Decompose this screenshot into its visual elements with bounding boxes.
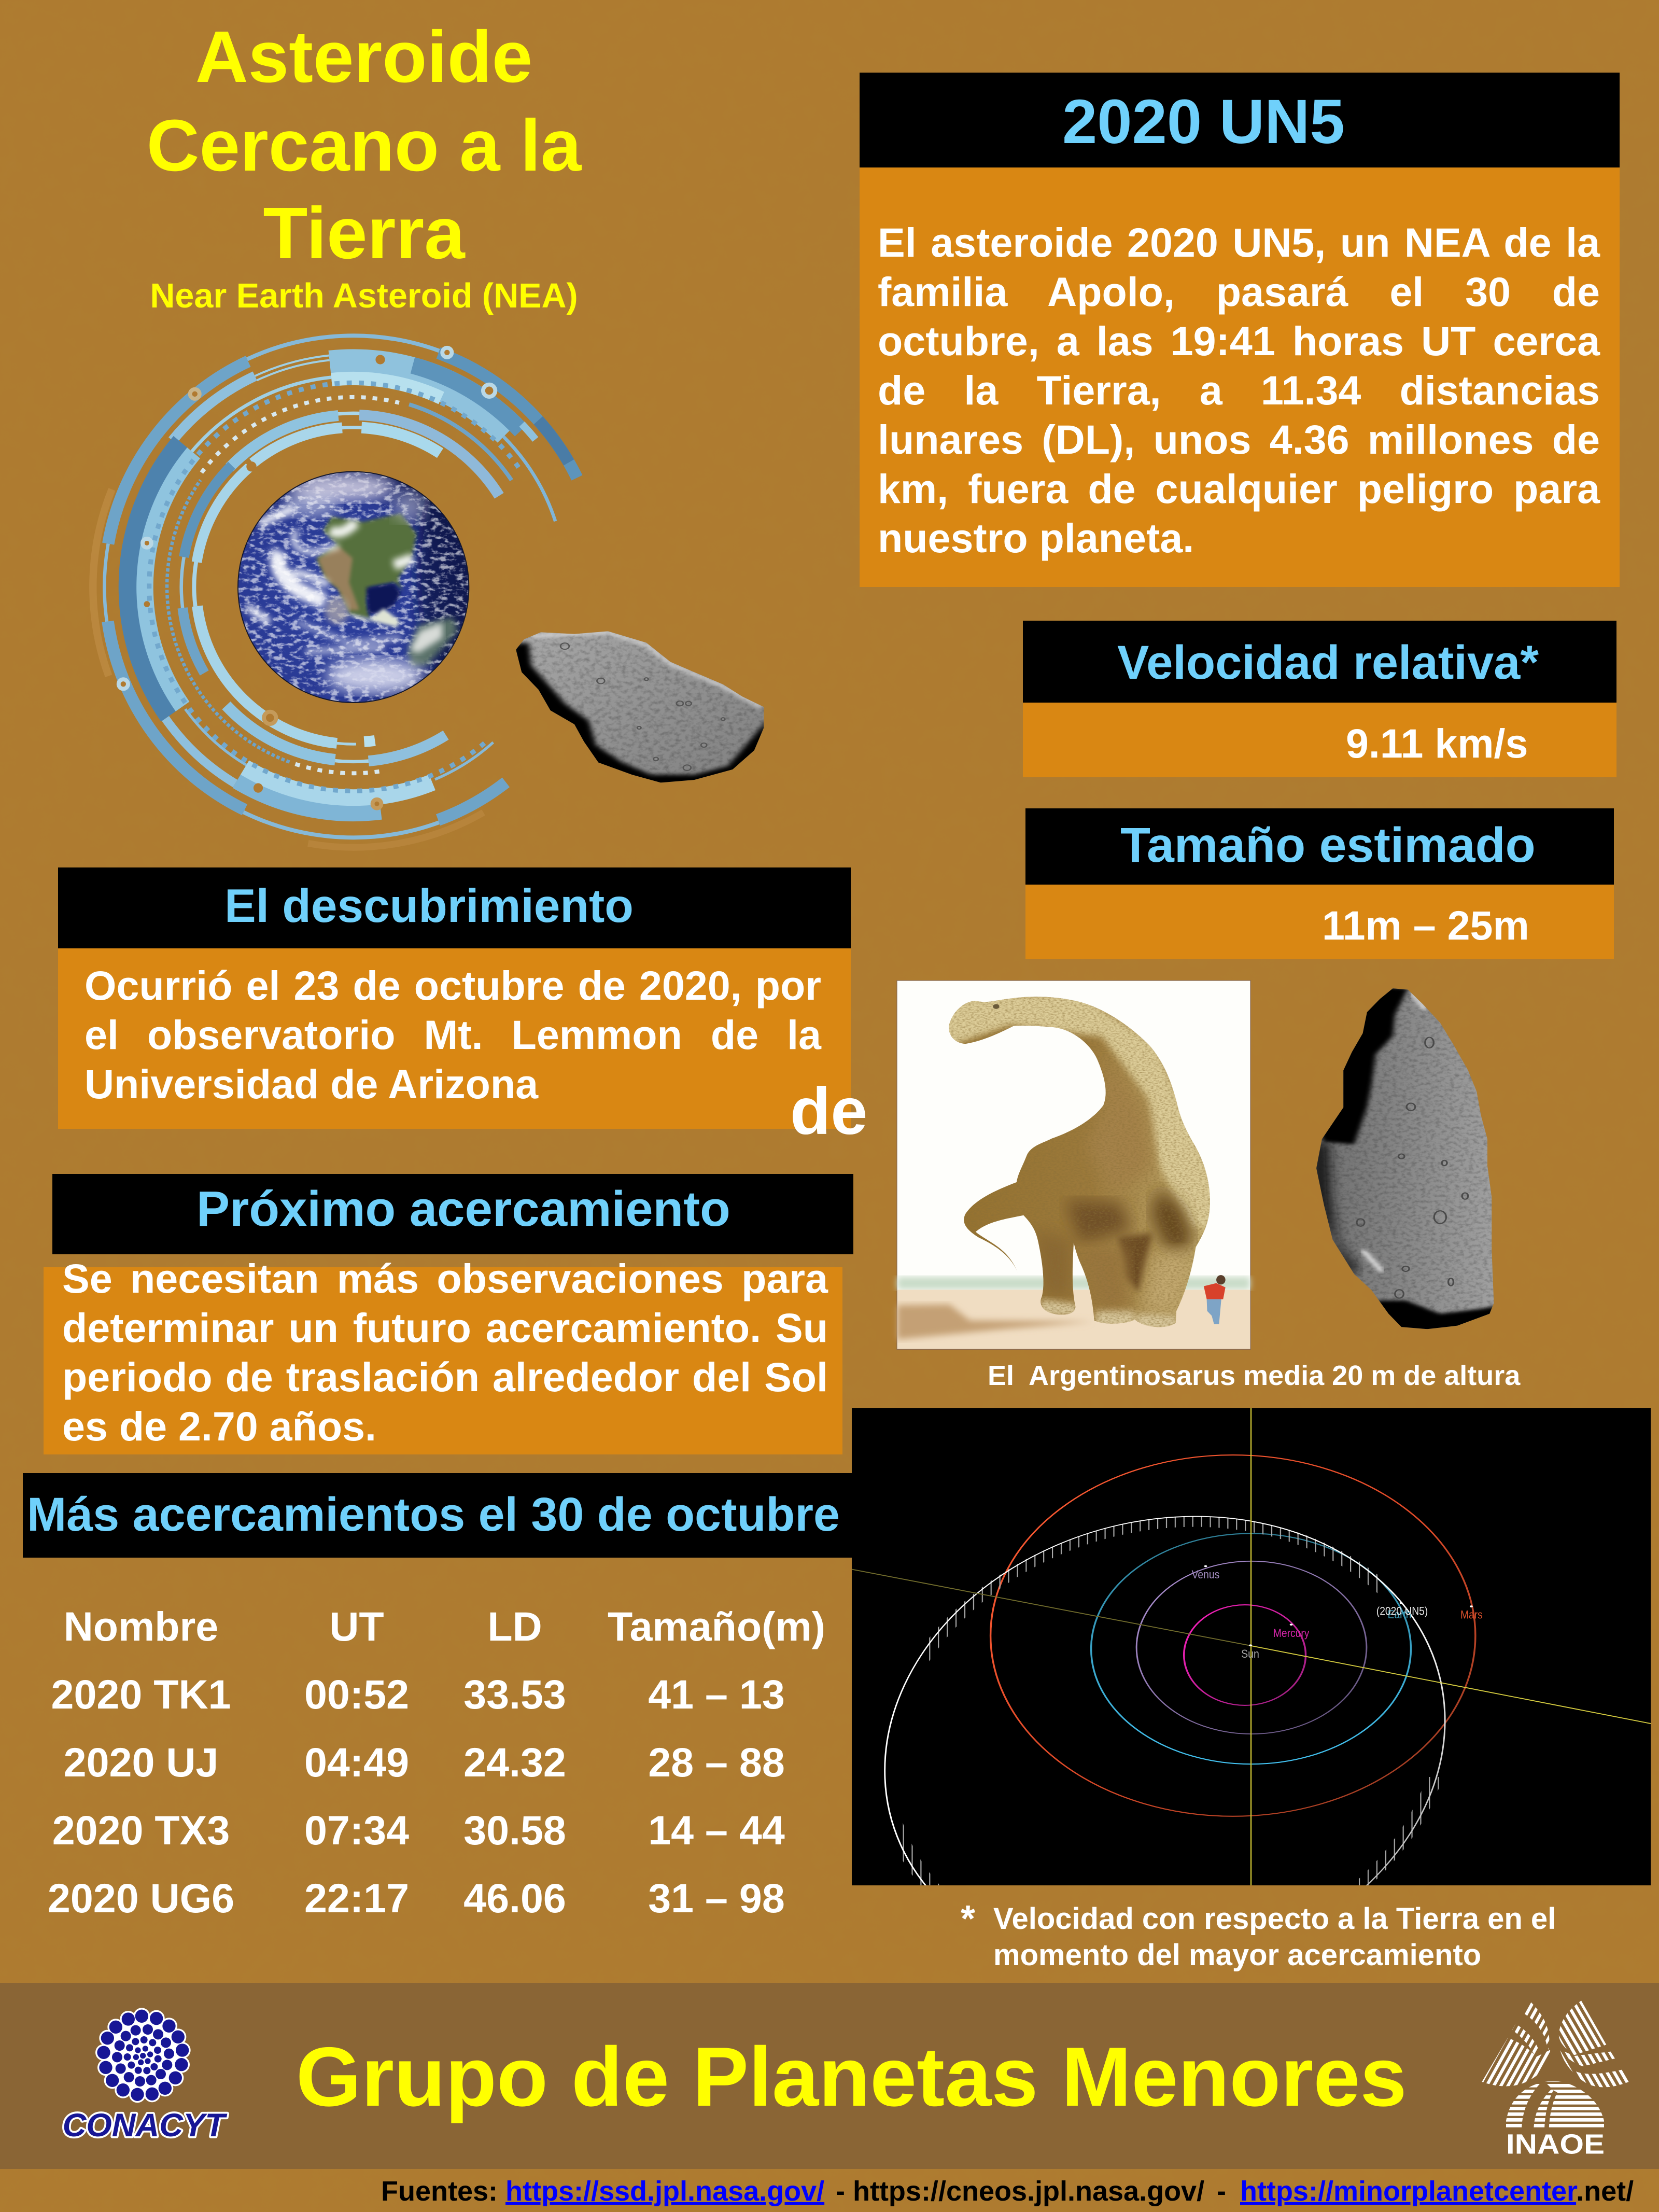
row 2020 UJ: 04:49 bbox=[304, 1739, 409, 1785]
logo: CONACYT: CONACYT bbox=[63, 2107, 228, 2144]
text box bbox=[44, 1267, 842, 1454]
heading bar bbox=[52, 1174, 853, 1254]
description text: de la Tierra, a 11.34 distancias bbox=[878, 367, 1600, 413]
panel: próximo acercamiento bbox=[44, 1174, 853, 1454]
row 2020 TX3: 07:34 bbox=[304, 1807, 409, 1853]
description text: km, fuera de cualquier peligro para bbox=[878, 466, 1600, 512]
heading bar: 2020 UN5 bbox=[860, 73, 1620, 167]
value box bbox=[1025, 885, 1614, 959]
heading bar bbox=[1023, 621, 1616, 703]
heading bar bbox=[58, 867, 851, 948]
description text bbox=[878, 219, 1600, 561]
floating word: de: de bbox=[790, 1074, 867, 1149]
illustration: Earth bbox=[237, 471, 470, 703]
row 2020 TX3: 14 – 44 bbox=[648, 1807, 785, 1853]
row 2020 TK1: 2020 TK1 bbox=[51, 1671, 231, 1717]
title line 2: Cercano a la bbox=[147, 104, 581, 186]
header row: LD bbox=[487, 1603, 542, 1649]
chart: orbit diagram: Earth bbox=[1388, 1608, 1411, 1621]
header row: Tamaño(m) bbox=[608, 1603, 825, 1649]
description box bbox=[860, 167, 1620, 587]
heading text: Tamaño estimado bbox=[1120, 818, 1536, 873]
row 2020 TX3 bbox=[31, 1810, 840, 1851]
chart: orbit diagram: Mercury bbox=[1273, 1627, 1310, 1640]
asterisk: * bbox=[961, 1898, 975, 1940]
logo: INAOE: INAOE bbox=[1506, 2129, 1605, 2160]
source link 3: https://minorplanetcenter.net/ bbox=[1240, 2176, 1634, 2207]
header row: UT bbox=[329, 1603, 384, 1649]
approach text bbox=[62, 1254, 828, 1451]
description text: El asteroide 2020 UN5, un NEA de la bbox=[878, 219, 1600, 265]
title line 1: Asteroide bbox=[195, 16, 532, 97]
caption: Argentinosaurus: El Argentinosarus media 20 m de altura bbox=[988, 1360, 1520, 1391]
panel: el descubrimiento bbox=[58, 867, 851, 1129]
illustration: asteroid 2020 UN5 wide bbox=[516, 631, 764, 783]
heading text: Próximo acercamiento bbox=[196, 1181, 730, 1237]
text box bbox=[58, 948, 851, 1129]
discovery text: Ocurrió el 23 de octubre de 2020, por bbox=[85, 962, 821, 1009]
title line 3: Tierra bbox=[263, 192, 465, 274]
header row: Nombre bbox=[64, 1603, 218, 1649]
illustration: blue orbital rings bbox=[89, 333, 583, 850]
heading text: Más acercamientos el 30 de octubre bbox=[27, 1488, 840, 1541]
approach text: Se necesitan más observaciones para bbox=[62, 1255, 828, 1301]
approach text: determinar un futuro acercamiento. Su bbox=[62, 1305, 828, 1351]
separator: - bbox=[1217, 2176, 1226, 2207]
row 2020 UG6 bbox=[31, 1878, 840, 1919]
row 2020 TK1 bbox=[31, 1674, 840, 1715]
approach text: periodo de traslación alrededor del Sol bbox=[62, 1354, 828, 1400]
row 2020 UJ: 24.32 bbox=[463, 1739, 566, 1785]
description text: familia Apolo, pasará el 30 de bbox=[878, 269, 1600, 315]
chart: orbit diagram: Mars bbox=[1460, 1609, 1483, 1621]
heading text: 2020 UN5 bbox=[1062, 86, 1345, 157]
row 2020 TX3: 2020 TX3 bbox=[52, 1807, 230, 1853]
footnote text line 1: Velocidad con respecto a la Tierra en el bbox=[993, 1902, 1556, 1936]
subtitle: Near Earth Asteroid (NEA) bbox=[150, 277, 578, 315]
footnote: velocity bbox=[959, 1900, 1581, 1973]
footer title: Grupo de Planetas Menores bbox=[296, 2030, 1407, 2124]
heading bar bbox=[1025, 808, 1614, 885]
discovery text: el observatorio Mt. Lemmon de la bbox=[85, 1012, 821, 1058]
footer band bbox=[0, 1983, 1659, 2169]
row 2020 TK1: 33.53 bbox=[463, 1671, 566, 1717]
description text: nuestro planeta. bbox=[878, 515, 1194, 561]
discovery text bbox=[85, 961, 821, 1109]
logo: CONACYT bbox=[47, 1996, 238, 2152]
title bbox=[147, 16, 582, 315]
sources line bbox=[381, 2177, 1638, 2209]
row 2020 UG6: 2020 UG6 bbox=[48, 1875, 234, 1921]
heading text: El descubrimiento bbox=[224, 880, 634, 932]
row 2020 TK1: 41 – 13 bbox=[648, 1671, 785, 1717]
value box bbox=[1023, 703, 1616, 777]
chart: orbit diagram bbox=[851, 1408, 1651, 1885]
approach text: es de 2.70 años. bbox=[62, 1403, 376, 1449]
source link 2: - https://cneos.jpl.nasa.gov/ bbox=[836, 2176, 1204, 2207]
heading text: Velocidad relativa* bbox=[1117, 636, 1539, 689]
row 2020 UJ: 2020 UJ bbox=[64, 1739, 218, 1785]
discovery text: Universidad de Arizona bbox=[85, 1061, 538, 1107]
row 2020 TX3: 30.58 bbox=[463, 1807, 566, 1853]
source label and link 1: Fuentes: https://ssd.jpl.nasa.gov/ bbox=[381, 2176, 824, 2207]
chart: orbit diagram: Venus bbox=[1192, 1569, 1219, 1581]
panel: más acercamientos heading bbox=[23, 1473, 852, 1558]
header row bbox=[31, 1606, 840, 1647]
illustration: asteroid 2020 UN5 upright bbox=[1316, 988, 1494, 1329]
table: close approaches bbox=[31, 1602, 840, 1924]
row 2020 UG6: 46.06 bbox=[463, 1875, 566, 1921]
description text: lunares (DL), unos 4.36 millones de bbox=[878, 416, 1600, 463]
row 2020 UJ: 28 – 88 bbox=[648, 1739, 785, 1785]
chart: orbit diagram: (2020 UN5) bbox=[1376, 1605, 1428, 1618]
value text: 9.11 km/s bbox=[1346, 720, 1528, 766]
row 2020 UG6: 31 – 98 bbox=[648, 1875, 785, 1921]
row 2020 TK1: 00:52 bbox=[304, 1671, 409, 1717]
panel: tamaño estimado bbox=[1025, 808, 1614, 959]
logo: INAOE bbox=[1462, 1986, 1638, 2162]
row 2020 UG6: 22:17 bbox=[304, 1875, 409, 1921]
panel: 2020 UN5 bbox=[860, 73, 1620, 587]
row 2020 UJ bbox=[31, 1742, 840, 1783]
illustration: Argentinosaurus with human for scale bbox=[893, 980, 1255, 1350]
description text: octubre, a las 19:41 horas UT cerca bbox=[878, 318, 1600, 364]
footnote text line 2: momento del mayor acercamiento bbox=[993, 1938, 1481, 1972]
value text: 11m – 25m bbox=[1322, 902, 1529, 948]
panel: velocidad relativa bbox=[1023, 621, 1616, 777]
chart: orbit diagram: Sun bbox=[1241, 1648, 1259, 1660]
